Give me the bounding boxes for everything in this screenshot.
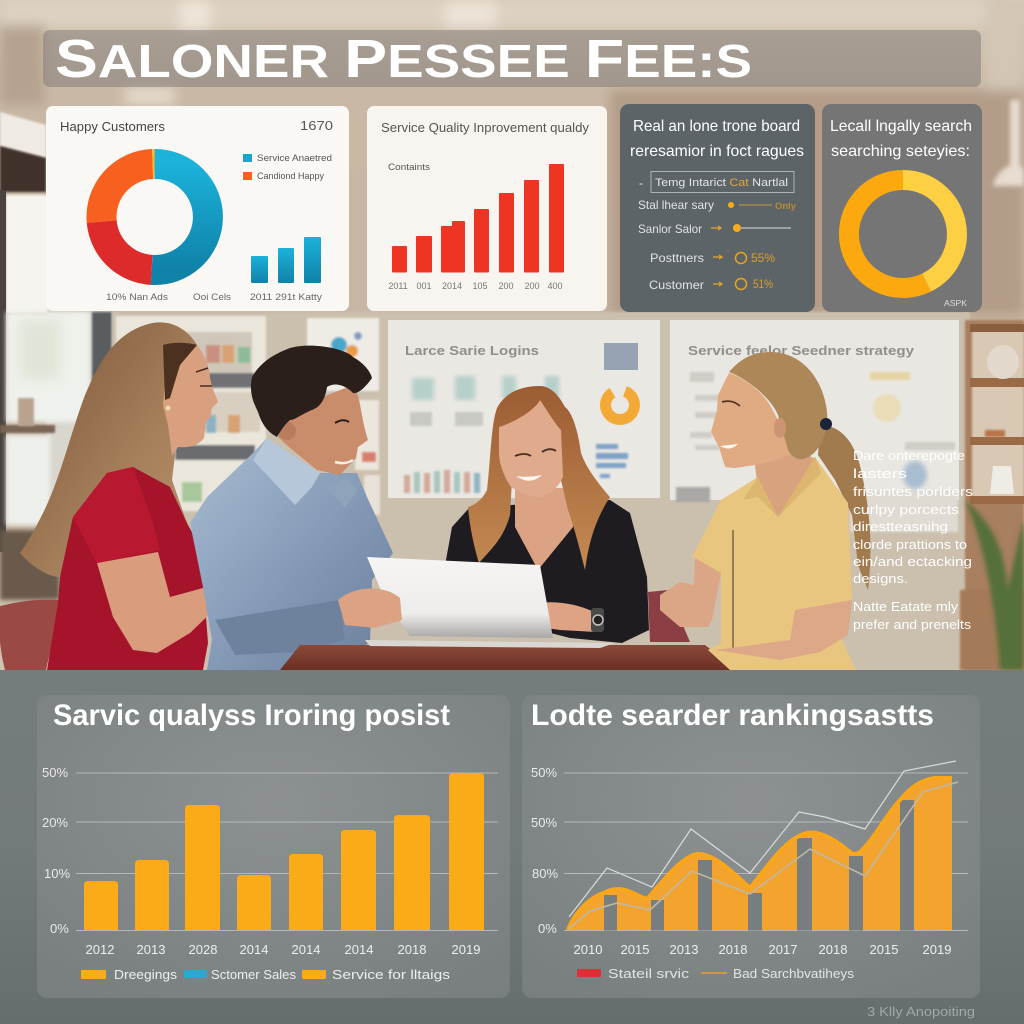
- title bar: SALONER PESSEE FEE:S: [55, 29, 752, 89]
- overlay text: side notes: direstteasnihg: [853, 520, 948, 534]
- x axis labels: 2028: [189, 942, 217, 957]
- legend: Sctomer Sales: [211, 967, 296, 982]
- x axis labels: 2018: [719, 942, 747, 957]
- area chart: orange: [568, 778, 952, 930]
- overlay text: side notes: Dare onterepogte: [853, 449, 965, 463]
- row: stal their sary: Stal lhear sary: [638, 198, 714, 212]
- axis labels: customers: [106, 292, 322, 303]
- panel: local search: [822, 104, 982, 312]
- panel: real time board: [620, 104, 815, 312]
- x axis labels: 2012: [86, 942, 114, 957]
- gridlines and y axis: 80%: [532, 866, 558, 881]
- line: upper series: [569, 761, 956, 917]
- wall shelf unit: [116, 316, 266, 511]
- small wall posters: [307, 318, 380, 515]
- panel: service quality: Containts: [388, 162, 430, 173]
- bar axis labels: [388, 281, 563, 291]
- legend: Stateil srvic: [608, 966, 690, 981]
- line: lower series: [568, 782, 958, 929]
- chair behind table: [648, 590, 690, 642]
- panel: real time board: reresamior in foct ragues: [630, 143, 804, 160]
- boxed row: -: [639, 176, 643, 190]
- gridlines and y axis: [531, 765, 968, 936]
- x axis labels: 2014: [240, 942, 268, 957]
- panel: service quality: Service Quality Inprovement qualdy: [381, 121, 590, 135]
- bar axis labels: 200: [498, 281, 514, 291]
- person: man in blue shirt: [190, 346, 393, 670]
- background board: large sales: [388, 320, 660, 498]
- x axis labels: 2013: [670, 942, 698, 957]
- donut chart: customers: [101, 164, 208, 270]
- bar chart: red: [392, 164, 564, 272]
- panel: local search: ASPK: [944, 299, 968, 308]
- row: stal their sary: Only: [775, 201, 797, 212]
- chair: [0, 600, 62, 670]
- x axis labels: 2019: [923, 942, 951, 957]
- background board: service strategy: Service feelor Seedner strategy: [688, 343, 915, 358]
- panel: service quality: [367, 106, 607, 311]
- donut chart: search: [849, 180, 957, 288]
- axis labels: customers: 2011 291t Katty: [250, 292, 322, 303]
- x axis labels: 2010: [574, 942, 602, 957]
- row: stal their sary: [638, 198, 797, 212]
- salon background: [0, 0, 1024, 670]
- overlay text: side notes: curlpy porcects: [853, 503, 959, 517]
- x axis labels: [86, 942, 480, 957]
- bar axis labels: 105: [472, 281, 488, 291]
- panel: local search: Lecall lngally search: [830, 118, 972, 135]
- x axis labels: 2018: [398, 942, 426, 957]
- person: woman in black top: [446, 386, 649, 643]
- panel: local search rankings chart: Lodte searder rankingsastts: [531, 699, 934, 732]
- overlay text: side notes: clorde prattions to: [853, 538, 967, 552]
- panel: local search: searching seteyies:: [831, 143, 970, 160]
- gridlines and y axis: 0%: [538, 921, 557, 936]
- gridlines and y axis: 50%: [531, 765, 557, 780]
- panel: happy customers: 1670: [300, 118, 333, 133]
- row: postners: [650, 251, 775, 265]
- gridlines and y axis: 50%: [42, 765, 68, 780]
- row: customer: Customer: [649, 278, 704, 292]
- overlay text: side notes: Natte Eatate mly: [853, 600, 959, 614]
- overlay text: side notes: frisuntes porlders: [853, 485, 973, 499]
- person: woman in red shirt: [20, 322, 257, 670]
- boxed row: Temg Intarict Cat Nartlal: [655, 177, 788, 189]
- legend: customers: Service Anaetred: [257, 153, 332, 164]
- panel: service quality bar chart: [37, 695, 510, 998]
- overlay text: side notes: prefer and prenelts: [853, 618, 971, 632]
- axis labels: customers: 10% Nan Ads: [106, 292, 168, 303]
- row: postners: Posttners: [650, 251, 704, 265]
- table: [280, 645, 737, 670]
- gridlines and y axis: 50%: [531, 815, 557, 830]
- x axis labels: 2013: [137, 942, 165, 957]
- bottom section background: [0, 670, 1024, 1024]
- boxed row: [639, 172, 794, 192]
- x axis labels: 2015: [870, 942, 898, 957]
- legend: Dreegings: [114, 967, 178, 982]
- legend: Bad Sarchbvatiheys: [733, 966, 855, 981]
- background board: large sales: Larce Sarie Logins: [405, 343, 539, 358]
- bar axis labels: 400: [547, 281, 563, 291]
- row: senior salon: [638, 222, 791, 236]
- legend: customers: Candiond Happy: [257, 171, 324, 182]
- footer note: 3 Klly Anopoiting: [867, 1005, 975, 1019]
- x axis labels: 2014: [345, 942, 373, 957]
- legend: Service for lltaigs: [332, 967, 451, 982]
- x axis labels: 2019: [452, 942, 480, 957]
- legend: [577, 966, 855, 981]
- gridlines and y axis: [42, 765, 498, 936]
- bars: orange: [84, 773, 484, 930]
- legend: customers: [243, 153, 332, 182]
- x axis labels: 2015: [621, 942, 649, 957]
- paper document: [338, 557, 615, 648]
- x axis labels: [574, 942, 951, 957]
- bar axis labels: 2011: [388, 281, 408, 291]
- gridlines and y axis: 0%: [50, 921, 69, 936]
- panel: happy customers: Happy Customers: [60, 120, 165, 134]
- overlay text: side notes: ein/and ectacking: [853, 555, 972, 569]
- row: customer: [649, 278, 773, 292]
- axis labels: customers: Ooi Cels: [193, 292, 231, 303]
- x axis labels: 2014: [292, 942, 320, 957]
- row: senior salon: Sanlor Salor: [638, 222, 702, 236]
- row: customer: 51%: [753, 279, 773, 291]
- panel: service quality bar chart: Sarvic qualyss Iroring posist: [53, 699, 450, 732]
- bar axis labels: 001: [416, 281, 432, 291]
- panel: local search rankings chart: [522, 695, 980, 998]
- panel: real time board: Real an lone trone board: [633, 118, 800, 135]
- x axis labels: 2018: [819, 942, 847, 957]
- x axis labels: 2017: [769, 942, 797, 957]
- overlay text: side notes: designs.: [853, 572, 908, 586]
- gridlines and y axis: 10%: [44, 866, 70, 881]
- overlay text: side notes: lasters: [853, 467, 907, 481]
- person: woman in yellow shirt: [660, 352, 870, 670]
- mini bar chart: blue: [251, 237, 321, 283]
- bar axis labels: 2014: [442, 281, 462, 291]
- overlay text: side notes: [853, 449, 973, 632]
- background board: service strategy: [670, 320, 959, 532]
- gridlines and y axis: 20%: [42, 815, 68, 830]
- bar axis labels: 200: [524, 281, 540, 291]
- legend: [81, 967, 451, 982]
- row: postners: 55%: [751, 253, 775, 265]
- panel: happy customers: [46, 106, 349, 311]
